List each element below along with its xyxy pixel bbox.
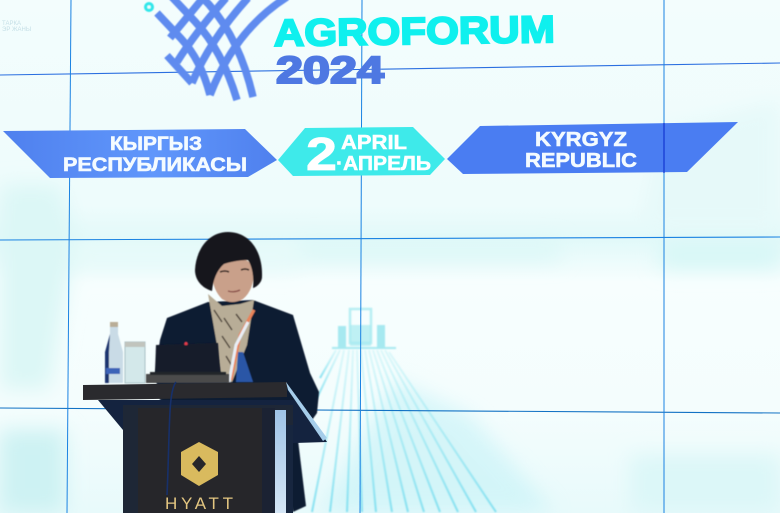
podium bbox=[83, 382, 327, 513]
banner: Kyrgyz Republic in English bbox=[447, 122, 738, 174]
face bbox=[212, 258, 254, 302]
speaker bbox=[155, 232, 319, 512]
icon: Hyatt hexagon bbox=[181, 442, 218, 486]
banner: Kyrgyz Republic in Kyrgyz: РЕСПУБЛИКАСЫ bbox=[63, 155, 247, 176]
water glass bbox=[125, 342, 145, 383]
banner: date: ·АПРЕЛЬ bbox=[336, 153, 431, 175]
scarf pattern bbox=[214, 310, 242, 366]
banner: date: APRIL bbox=[341, 132, 407, 154]
podium underside bbox=[98, 400, 327, 444]
tractor bbox=[332, 309, 396, 349]
crop rows bbox=[312, 350, 496, 512]
banner: date bbox=[278, 127, 445, 180]
icon: Agroforum woven logo bbox=[144, 0, 287, 100]
facial features bbox=[220, 269, 249, 272]
faint corner caption: ЭР ЖАНЫ bbox=[2, 27, 31, 33]
soft field texture bbox=[320, 380, 555, 513]
banner: Kyrgyz Republic in Kyrgyz: КЫРГЫЗ bbox=[110, 134, 202, 155]
podium top slab bbox=[83, 382, 287, 400]
podium body bbox=[123, 405, 293, 513]
banner: Kyrgyz Republic in English: KYRGYZ bbox=[535, 129, 627, 151]
tie bbox=[236, 352, 253, 382]
faint corner caption bbox=[2, 21, 31, 33]
podium brand name: HYATT bbox=[165, 494, 233, 513]
banner: date: 2 bbox=[306, 128, 337, 180]
podium light edge bbox=[286, 382, 327, 441]
water bottle bbox=[105, 322, 123, 383]
title: AGROFORUM: AGROFORUM bbox=[274, 9, 555, 55]
title: 2024: 2024 bbox=[276, 50, 384, 92]
microphone cable bbox=[167, 382, 176, 495]
banner: Kyrgyz Republic in English: REPUBLIC bbox=[525, 150, 637, 172]
banner: Kyrgyz Republic in Kyrgyz bbox=[3, 129, 277, 178]
lectern monitor bbox=[146, 342, 229, 383]
lanyard bbox=[231, 310, 254, 380]
hair bbox=[195, 232, 262, 291]
LED wall background bbox=[0, 106, 780, 513]
faint corner caption: ТАРКА bbox=[2, 21, 21, 27]
scarf bbox=[208, 294, 254, 382]
field rows and tractor on the screen bbox=[312, 309, 555, 513]
jacket bbox=[155, 300, 319, 512]
